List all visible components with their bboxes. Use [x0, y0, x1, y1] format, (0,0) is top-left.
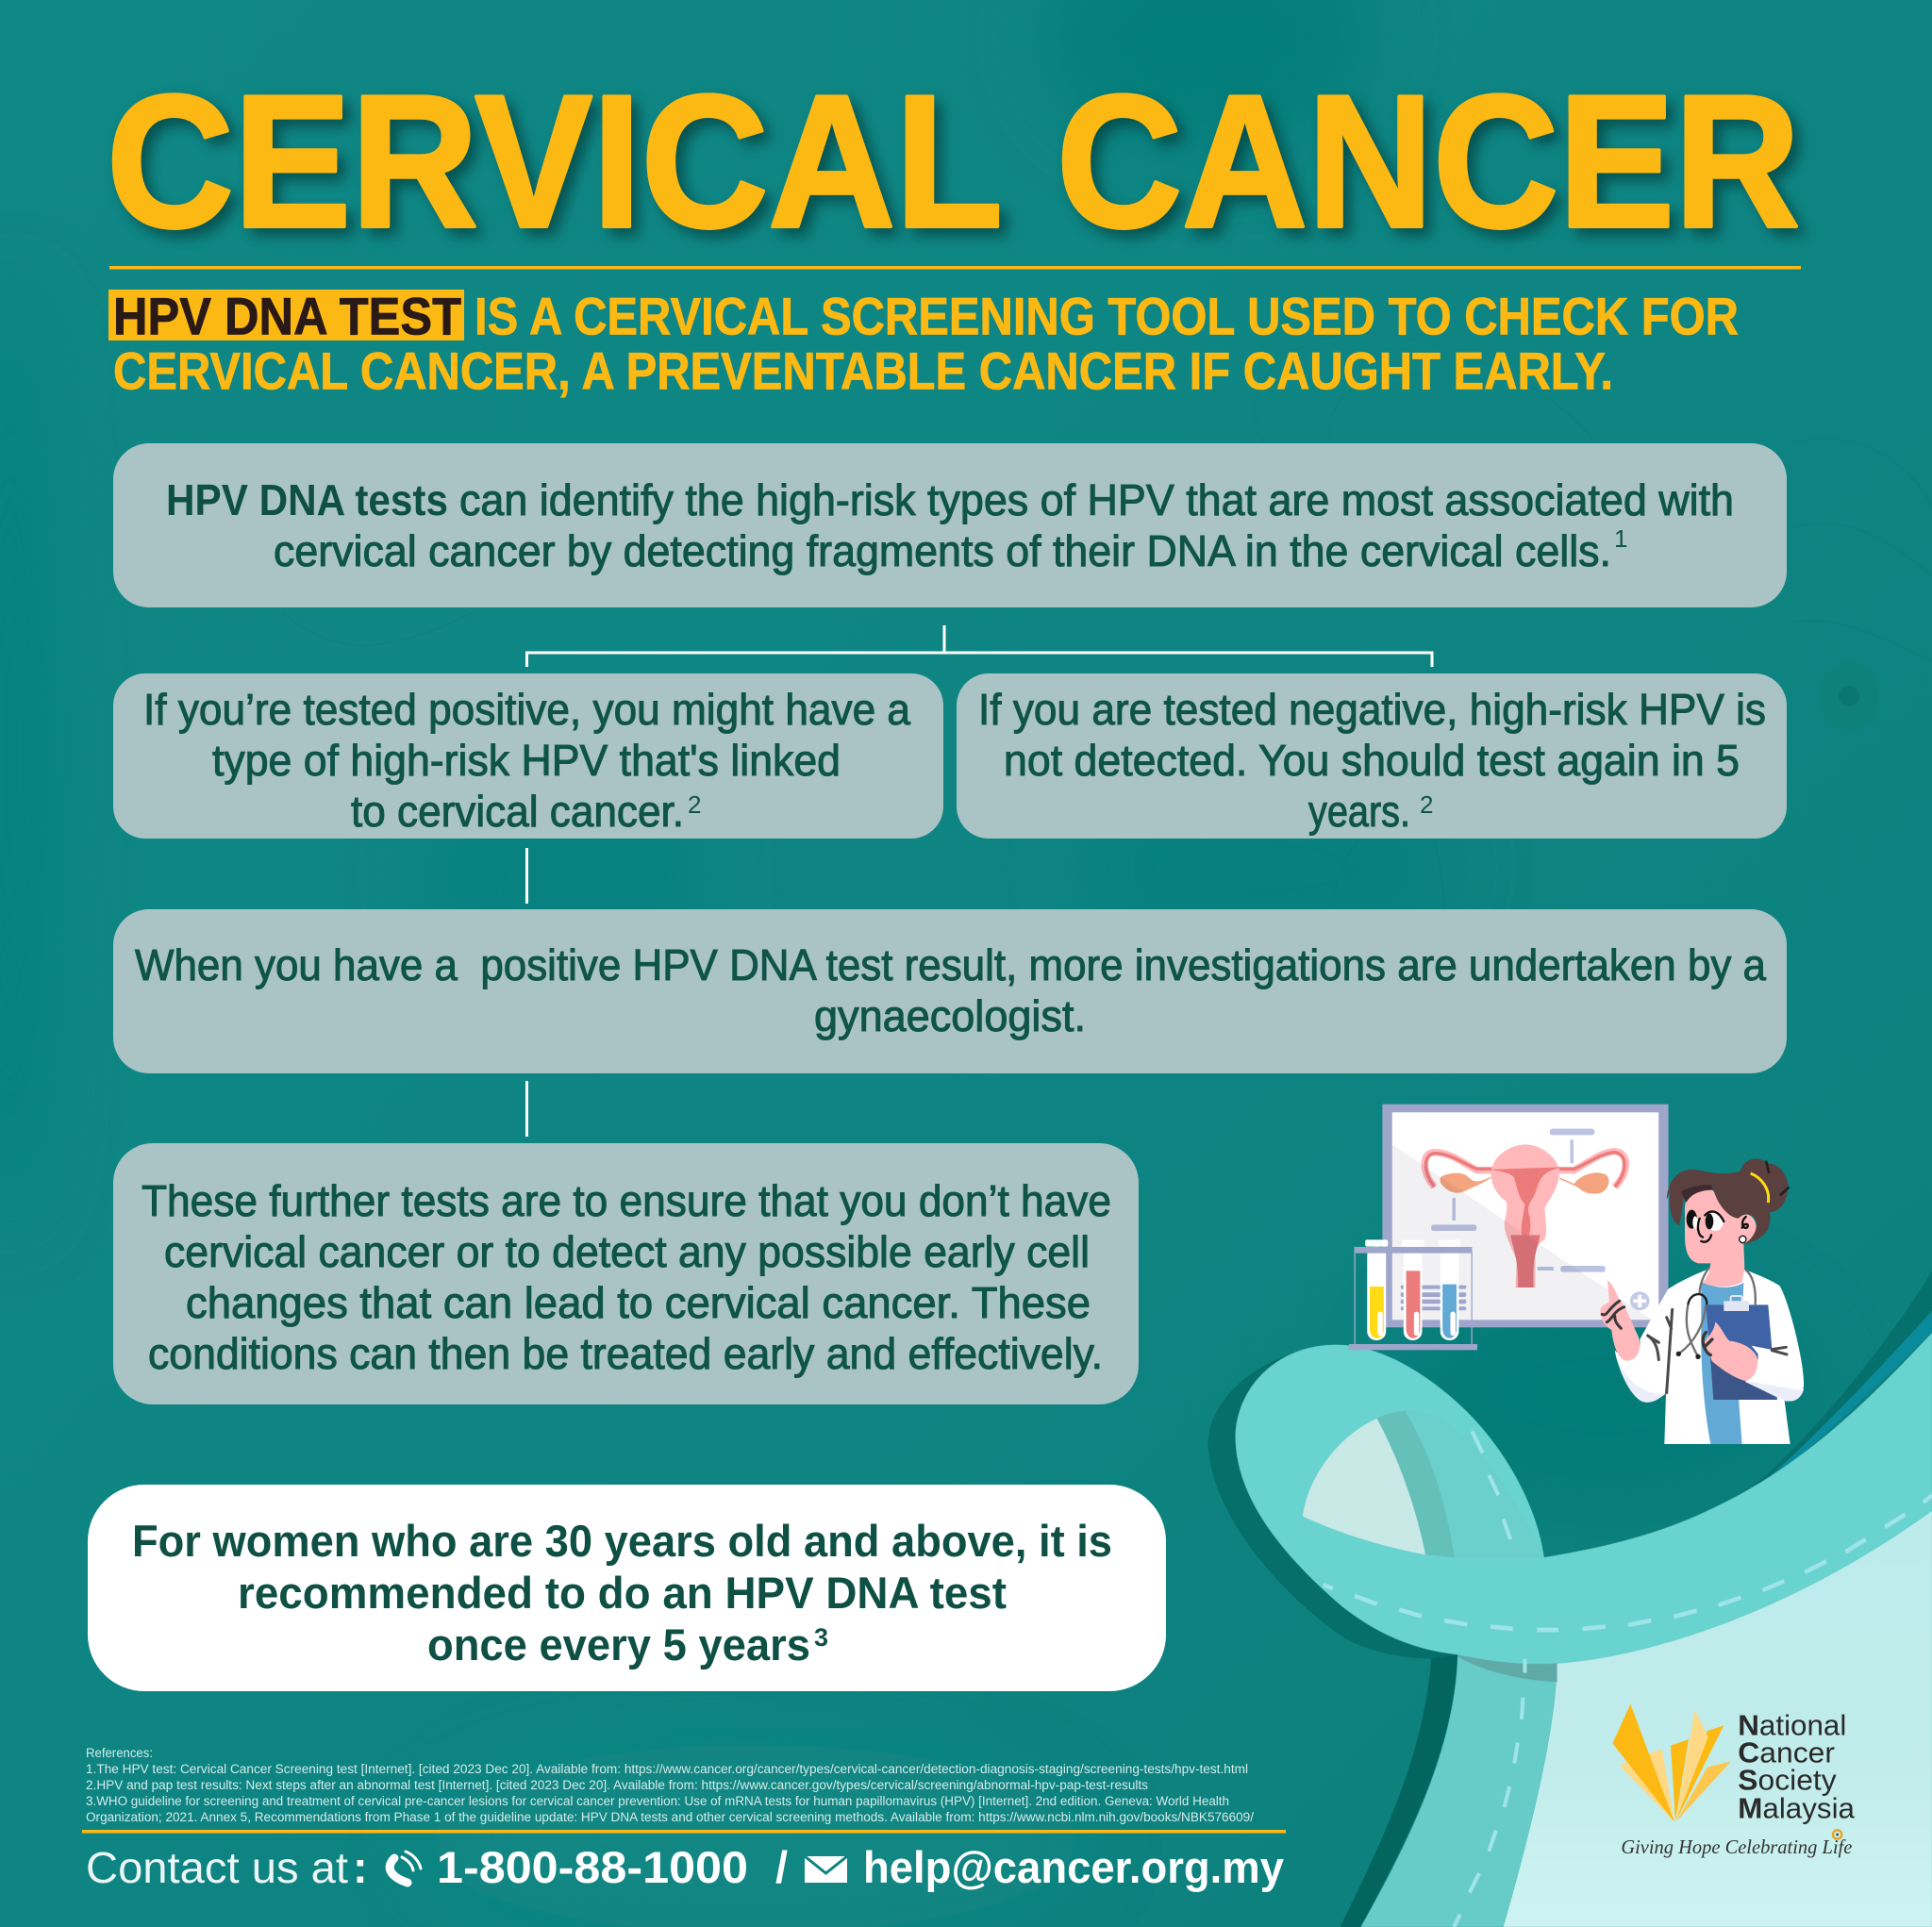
tagline swirl — [1833, 1830, 1841, 1839]
title — [107, 57, 1800, 267]
line 3: once every 5 years — [427, 1620, 810, 1670]
subtitle line 2: CERVICAL CANCER, A PREVENTABLE CANCER IF CAUGHT EARLY. — [113, 341, 1613, 400]
line 2: cervical cancer by detecting fragments of their DNA in the cervical cells. — [274, 526, 1611, 575]
logo wordmark: Society — [1738, 1765, 1837, 1797]
colon: : — [353, 1842, 368, 1892]
panel box — [957, 673, 1787, 839]
logo wordmark — [1738, 1709, 1856, 1824]
reference 3 continued: Organization; 2021. Annex 5, Recommendations from Phase 1 of the guideline update: HPV DNA tests and other cervical screening methods. Available from: https://www.ncbi.nlm.nih.gov/books/NBK576609/ — [86, 1810, 1254, 1824]
ribbon graphic — [1208, 1271, 1932, 1927]
line 3: changes that can lead to cervical cancer. These — [186, 1278, 1091, 1327]
panel: further investigation — [113, 909, 1787, 1073]
bold lead: HPV DNA tests — [166, 475, 448, 524]
separator: / — [775, 1842, 788, 1892]
icon: phone — [390, 1852, 421, 1883]
logo tagline: Giving Hope Celebrating Life — [1621, 1837, 1852, 1858]
line 1: These further tests are to ensure that you don’t have — [142, 1176, 1111, 1225]
diagram label lines — [1431, 1129, 1606, 1272]
logo wordmark: National — [1738, 1709, 1846, 1741]
right sleeve — [1745, 1346, 1804, 1402]
hair — [1667, 1158, 1788, 1244]
email: help@cancer.org.my — [863, 1842, 1284, 1892]
board sheen — [1392, 1144, 1652, 1320]
line 1: can identify the high-risk types of HPV that are most associated with — [459, 475, 1734, 524]
highlighted term: HPV DNA TEST — [113, 287, 461, 345]
line 1: If you are tested negative, high-risk HPV is — [978, 685, 1766, 734]
light corner area — [1504, 1511, 1932, 1927]
subtitle line 1: IS A CERVICAL SCREENING TOOL USED TO CHECK FOR — [475, 287, 1739, 345]
connector — [525, 1081, 528, 1137]
contact bar — [86, 1842, 1284, 1892]
connector — [525, 848, 528, 904]
line 4: conditions can then be treated early and effectively. — [148, 1329, 1103, 1378]
reference heading: References: — [86, 1746, 153, 1760]
pointing hand — [1600, 1280, 1640, 1361]
panel box — [113, 443, 1787, 607]
line 3: years. — [1308, 787, 1410, 836]
logo mark — [1612, 1704, 1731, 1822]
hair shadow — [1681, 1185, 1713, 1203]
subtitle — [108, 287, 1739, 400]
line 3: to cervical cancer. — [351, 787, 684, 836]
stethoscope tips — [1676, 1352, 1701, 1359]
superscript: 2 — [1420, 790, 1433, 819]
illustration: doctor — [1600, 1158, 1804, 1444]
ribbon shadow — [1208, 1345, 1457, 1659]
callout: recommendation — [88, 1485, 1166, 1691]
line 2: gynaecologist. — [814, 991, 1086, 1040]
panel box — [113, 909, 1787, 1073]
loop opening — [1303, 1419, 1425, 1554]
logo: National Cancer Society Malaysia — [1612, 1704, 1856, 1858]
line 2: type of high-risk HPV that's linked — [212, 736, 841, 785]
callout box — [88, 1485, 1166, 1691]
panel: positive result — [113, 673, 943, 839]
cuff shade — [1746, 1381, 1803, 1402]
face — [1685, 1190, 1757, 1277]
loop inner fold — [1405, 1411, 1544, 1557]
coat seams — [1648, 1309, 1787, 1393]
line 1: When you have a positive HPV DNA test result, more investigations are undertaken by a — [135, 940, 1766, 989]
panel: negative result — [957, 673, 1787, 839]
ribbon band — [1236, 1333, 1932, 1664]
blue sliver — [1746, 1311, 1932, 1497]
line 1: If you’re tested positive, you might have a — [143, 685, 910, 734]
line 1: For women who are 30 years old and above, it is — [132, 1516, 1112, 1566]
board frame — [1382, 1105, 1669, 1327]
uterus diagram — [1424, 1144, 1625, 1287]
panel: purpose of further tests — [113, 1143, 1139, 1404]
word one: CERVICAL — [107, 57, 1003, 267]
shirt — [1701, 1281, 1743, 1444]
board surface — [1392, 1112, 1658, 1320]
holding hand — [1705, 1322, 1757, 1381]
road dashes — [1324, 1431, 1932, 1927]
title rule — [109, 266, 1801, 270]
line 2: not detected. You should test again in 5 — [1004, 736, 1740, 785]
pointing hand fingers — [1602, 1301, 1624, 1328]
stethoscope — [1679, 1268, 1756, 1356]
highlight — [108, 290, 464, 341]
line 2: cervical cancer or to detect any possible early cell — [164, 1227, 1090, 1276]
line 2: recommended to do an HPV DNA test — [238, 1568, 1007, 1618]
footer rule — [82, 1830, 1286, 1834]
logo wordmark: Cancer — [1738, 1737, 1835, 1769]
plus badge — [1630, 1291, 1650, 1310]
panel box — [113, 673, 943, 839]
neck — [1703, 1245, 1744, 1287]
reference 2: 2.HPV and pap test results: Next steps after an abnormal test [Internet]. [cited 2023 Dec 20]. Available from: https://www.cancer.gov/types/cervical/screening/abnormal-hpv-pap-test-results — [86, 1778, 1148, 1792]
illustration: anatomy board and test tubes — [1349, 1105, 1669, 1350]
hair tie — [1751, 1173, 1769, 1203]
panel: what HPV DNA tests do — [113, 443, 1787, 607]
references — [86, 1746, 1254, 1824]
superscript: 1 — [1614, 524, 1627, 553]
word two: CANCER — [1057, 57, 1800, 267]
holding hand fingers — [1703, 1333, 1712, 1355]
branch connector — [526, 625, 1432, 667]
clipboard — [1706, 1304, 1777, 1400]
reference 1: 1.The HPV test: Cervical Cancer Screening test [Internet]. [cited 2023 Dec 20]. Available from: https://www.cancer.org/cancer/types/cervical-cancer/detection-diagnosis-staging/screening-tests/hpv-test.html — [86, 1762, 1248, 1776]
panel box — [113, 1143, 1139, 1404]
sleeve shade — [1615, 1352, 1663, 1403]
test tube rack — [1349, 1239, 1477, 1350]
superscript: 3 — [814, 1623, 828, 1652]
loop strip — [1377, 1411, 1455, 1557]
superscript: 2 — [688, 790, 701, 819]
reference 3: 3.WHO guideline for screening and treatment of cervical pre-cancer lesions for cervical cancer prevention: Use of mRNA tests for human papillomavirus (HPV) [Internet]. 2nd edition. Geneva: World Health — [86, 1794, 1229, 1808]
upper edge shadow — [1544, 1271, 1932, 1557]
contact label: Contact us at — [86, 1843, 348, 1892]
eyes and features — [1687, 1210, 1748, 1243]
icon: envelope — [805, 1856, 847, 1883]
clipboard clip — [1724, 1296, 1749, 1311]
coat — [1615, 1269, 1804, 1444]
phone number: 1-800-88-1000 — [437, 1842, 748, 1892]
ribbon fold shade — [1457, 1653, 1557, 1682]
ribbon tail — [1360, 1654, 1557, 1927]
logo wordmark: Malaysia — [1738, 1792, 1856, 1824]
ribbon tail shadow — [1340, 1654, 1457, 1927]
hair strands — [1766, 1162, 1789, 1195]
